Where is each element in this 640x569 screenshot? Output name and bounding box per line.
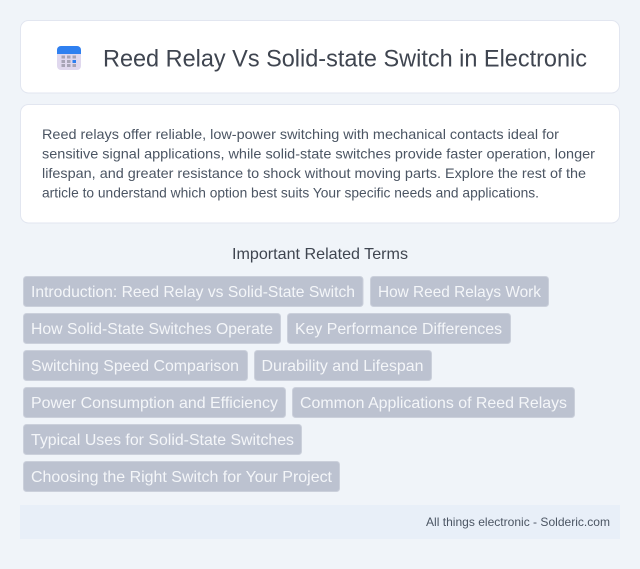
footer: All things electronic - Solderic.com [426,515,610,529]
tag: Choosing the Right Switch for Your Project [31,469,333,486]
tag: Power Consumption and Efficiency [31,395,278,412]
tag: Switching Speed Comparison [31,358,239,375]
title: Reed Relay Vs Solid-state Switch in Electronic [103,46,587,72]
tag: Durability and Lifespan [262,358,424,375]
tag: Key Performance Differences [295,321,502,338]
tag [24,424,302,454]
tag [24,350,248,380]
panel: title card [20,20,620,93]
tag [24,462,340,492]
panel: term tags [24,276,574,492]
text block: description: sensitive signal applications, while solid-state switches provide faster operation, longer [42,146,595,162]
tag: How Solid-State Switches Operate [31,321,273,338]
text block: description: lifespan, and greater resistance to shock without moving parts. Explore the rest of the [42,165,586,181]
heading: related terms: Important Related Terms [232,246,408,263]
tag [370,276,548,306]
text block: description [42,126,595,201]
tag: How Reed Relays Work [378,284,542,301]
tag [24,276,363,306]
footer [20,505,620,539]
tag: Common Applications of Reed Relays [300,395,567,412]
icon: calendar [57,46,81,70]
tag: Introduction: Reed Relay vs Solid-State Switch [31,284,355,301]
panel: description [20,104,620,223]
tag [254,350,432,380]
tag [292,388,574,418]
text block: description: Reed relays offer reliable, low-power switching with mechanical contacts ideal for [42,126,559,142]
tag [288,314,510,344]
tag [24,388,286,418]
text block: description: article to understand which option best suits Your specific needs and applications. [42,185,539,201]
tag: Typical Uses for Solid-State Switches [31,432,294,449]
tag [24,314,280,344]
